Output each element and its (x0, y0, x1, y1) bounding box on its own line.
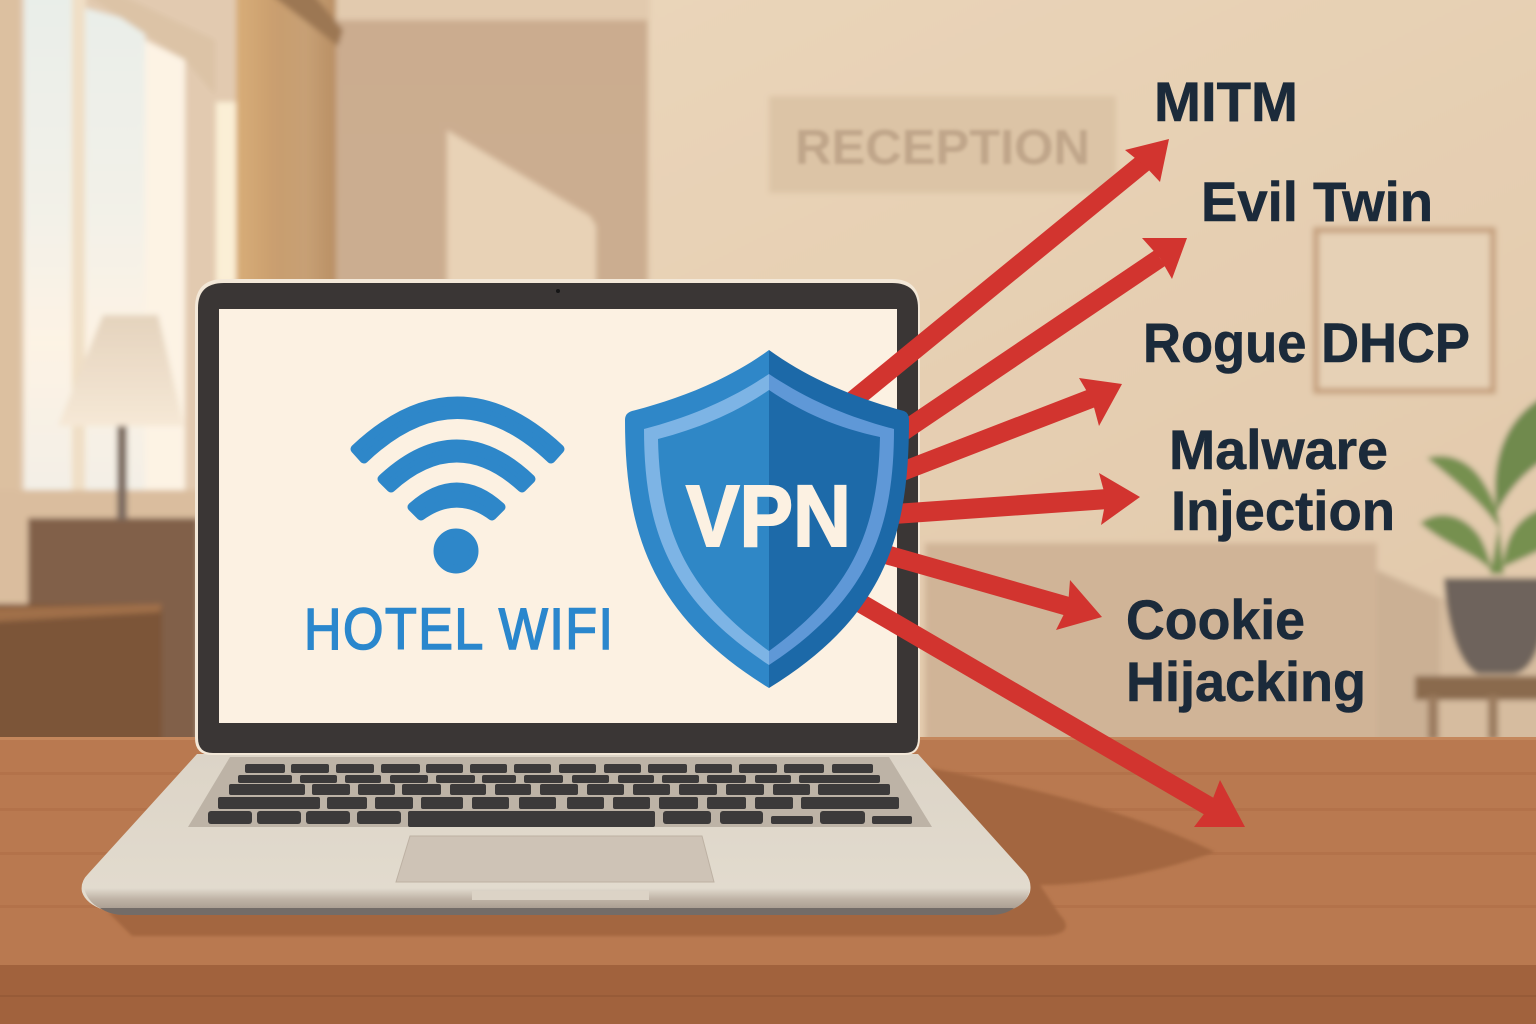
laptop (82, 279, 1031, 915)
arrow: past table (850, 597, 1245, 827)
pot (1444, 578, 1536, 674)
arrow: to Malware Injection (880, 473, 1140, 525)
sofa (1377, 570, 1445, 745)
plant leaves (1427, 456, 1500, 530)
window frame (20, 0, 240, 740)
threat label: Malware Injection: Injection (1171, 479, 1395, 542)
threat label: Cookie Hijacking (1126, 588, 1366, 713)
touchpad (396, 836, 714, 882)
keyboard keys (208, 764, 912, 827)
threat label: Malware Injection: Malware (1169, 418, 1388, 481)
keyboard well (188, 757, 932, 827)
threat label: MITM: MITM (1154, 70, 1298, 133)
arrow: to Cookie Hijacking (870, 550, 1102, 630)
threat label: Evil Twin: Evil Twin (1201, 170, 1433, 233)
shield label: VPN: VPN (686, 468, 851, 565)
arrow: to Rogue DHCP (880, 378, 1122, 480)
red threat arrows (840, 139, 1245, 827)
threat label: Cookie Hijacking: Hijacking (1126, 650, 1366, 713)
lower left wall and furniture (0, 490, 200, 610)
RECEPTION sign plate (769, 96, 1116, 193)
laptop base (82, 754, 1031, 915)
laptop screen (219, 309, 897, 723)
arrow: to MITM (840, 139, 1169, 411)
label: HOTEL WIFI: HOTEL WIFI (304, 596, 613, 662)
laptop lid (195, 279, 920, 755)
threat label: Cookie Hijacking: Cookie (1126, 588, 1305, 651)
arrow: to Evil Twin (880, 238, 1187, 447)
side table (1415, 676, 1536, 700)
picture frame (1316, 230, 1493, 391)
threat label: Rogue DHCP: Rogue DHCP (1143, 311, 1470, 374)
curtain (236, 0, 336, 750)
icon: VPN shield (625, 350, 909, 688)
lamp (117, 420, 127, 520)
background: blurred hotel lobby (0, 0, 1536, 750)
laptop shadow on table (108, 768, 1215, 936)
table (0, 737, 1536, 1024)
threat label: Malware Injection (1169, 418, 1395, 542)
icon: wifi (355, 401, 560, 569)
sign text: RECEPTION (795, 121, 1090, 175)
